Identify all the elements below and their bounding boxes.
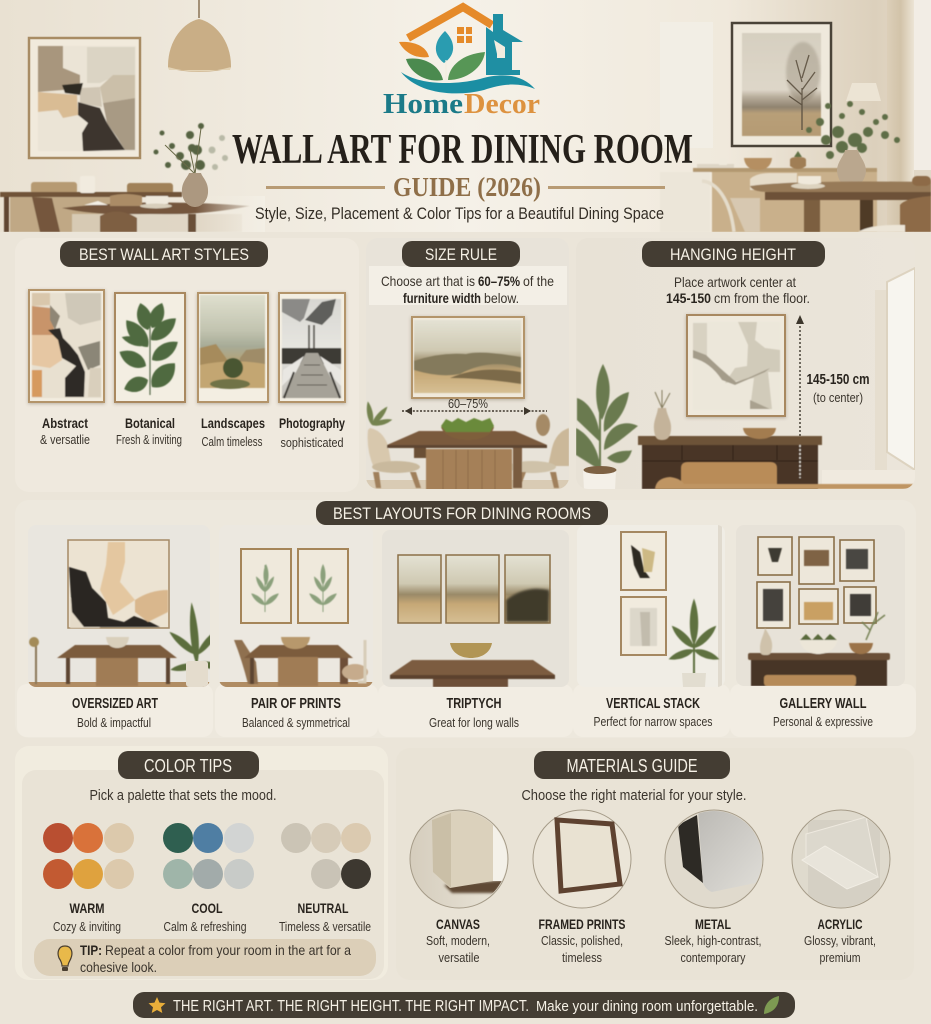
palette: warm: Cozy & inviting <box>53 919 121 934</box>
panel: color tips <box>15 746 388 980</box>
material: acrylic: Glossy, vibrant, <box>804 933 876 948</box>
label: pair of prints: Balanced & symmetrical <box>242 715 350 730</box>
height label: 145-150 cm <box>806 372 870 388</box>
label: gallery wall: GALLERY WALL <box>780 696 867 712</box>
icon: light bulb <box>58 946 72 971</box>
size rule plant <box>365 401 393 427</box>
heading: hanging height <box>642 241 825 267</box>
heading: color tips: COLOR TIPS <box>144 756 232 776</box>
label: triptych: Great for long walls <box>429 715 519 730</box>
height label: (to center) <box>813 390 863 405</box>
material: metal <box>664 810 770 965</box>
tip callout: cohesive look. <box>80 959 157 975</box>
left dining furniture <box>0 176 250 232</box>
gallery frame pictures <box>763 548 871 621</box>
palette: cool <box>163 823 254 934</box>
label: oversized art: OVERSIZED ART <box>72 696 158 712</box>
material: framed prints <box>533 810 631 965</box>
material: metal: METAL <box>695 916 731 932</box>
tip callout <box>34 939 376 976</box>
material: canvas: CANVAS <box>436 916 480 932</box>
size rule dining set <box>368 414 569 491</box>
color tips intro: Pick a palette that sets the mood. <box>90 787 276 804</box>
size rule artwork <box>412 317 524 398</box>
material: framed prints: Classic, polished, <box>541 933 623 948</box>
left fade <box>198 203 250 232</box>
layout: oversized art <box>28 539 210 730</box>
panel: materials guide <box>396 748 914 980</box>
size rule width arrow <box>402 399 547 415</box>
heading: best wall art styles <box>60 241 268 267</box>
hanging height text: 145-150 <box>666 290 711 306</box>
layout: triptych <box>389 554 556 730</box>
sideboard <box>638 436 822 489</box>
guide subtitle: GUIDE (2026) <box>393 172 541 202</box>
window <box>875 268 915 470</box>
label: oversized art: Bold & impactful <box>77 715 151 730</box>
right sideboard and bowls <box>692 150 878 232</box>
heading: color tips <box>118 751 259 779</box>
sofa <box>655 462 915 489</box>
pair dining set <box>234 637 368 686</box>
label: vertical stack: VERTICAL STACK <box>606 696 700 712</box>
palette: warm: WARM <box>70 900 104 916</box>
label: landscapes: Landscapes <box>201 415 265 431</box>
palette: neutral: NEUTRAL <box>298 900 349 916</box>
size rule text: Choose art that is <box>381 273 475 289</box>
label: photography <box>279 415 345 450</box>
title: WALL ART FOR DINING ROOM <box>232 127 693 173</box>
logo leaves <box>399 31 485 81</box>
material: canvas: versatile <box>438 950 480 965</box>
panel: hanging height <box>576 238 915 490</box>
pair artworks <box>241 549 348 623</box>
size rule text: furniture width <box>403 290 481 306</box>
logo <box>383 7 540 120</box>
guide subtitle <box>266 172 665 202</box>
heading: best layouts <box>316 501 608 525</box>
logo wordmark <box>383 89 540 120</box>
panel: size rule <box>365 238 569 491</box>
size rule width arrow: 60–75% <box>448 396 488 411</box>
heading: size rule <box>402 241 520 267</box>
material: acrylic: ACRYLIC <box>818 916 862 932</box>
material: canvas: Soft, modern, <box>426 933 490 948</box>
height label <box>806 372 870 405</box>
heading: best wall art styles: BEST WALL ART STYLES <box>79 245 249 264</box>
height arrow <box>796 315 804 436</box>
gallery frames <box>757 537 876 628</box>
palette: neutral <box>279 823 371 934</box>
triptych table <box>390 660 555 687</box>
label: gallery wall: Personal & expressive <box>773 714 873 729</box>
label: landscapes <box>201 415 265 449</box>
material: acrylic <box>792 810 890 965</box>
material: metal: Sleek, high-contrast, <box>664 933 762 948</box>
left abstract artwork <box>29 38 140 158</box>
oversized artwork <box>68 540 169 628</box>
panel: best layouts <box>15 500 916 738</box>
layout: vertical stack <box>594 525 722 728</box>
label: photography: sophisticated <box>280 436 344 450</box>
material: canvas <box>410 810 508 965</box>
vase and bowl <box>654 390 776 440</box>
artwork: photography <box>279 293 345 402</box>
footer message: Make your dining room unforgettable. <box>536 998 758 1015</box>
palette: cool: Calm & refreshing <box>164 919 246 934</box>
label: oversized art <box>72 696 158 730</box>
label: vertical stack <box>594 696 713 729</box>
material: metal: contemporary <box>680 950 746 965</box>
label: abstract: & versatlie <box>40 433 90 447</box>
left vase with plant <box>154 123 228 207</box>
label: vertical stack: Perfect for narrow spaces <box>594 714 713 729</box>
logo wave <box>401 72 535 93</box>
heading: best layouts: BEST LAYOUTS FOR DINING ROOMS <box>333 504 591 523</box>
size rule text: 60–75% <box>478 273 520 289</box>
label: pair of prints: PAIR OF PRINTS <box>251 696 341 712</box>
icon: star <box>148 997 166 1013</box>
heading: hanging height: HANGING HEIGHT <box>670 245 796 264</box>
size rule text <box>381 273 554 306</box>
label: triptych: TRIPTYCH <box>446 696 502 712</box>
heading: size rule: SIZE RULE <box>425 245 497 264</box>
panel: best wall art styles <box>15 238 359 492</box>
icon: leaf <box>764 996 779 1014</box>
gallery console and objects <box>748 612 890 686</box>
artwork: abstract <box>29 290 104 402</box>
footer banner <box>133 992 795 1018</box>
heading: materials guide: MATERIALS GUIDE <box>566 756 698 776</box>
size rule text: below. <box>484 290 519 306</box>
label: botanical: Botanical <box>125 415 175 431</box>
size rule text: of the <box>523 273 554 289</box>
material: framed prints: FRAMED PRINTS <box>538 916 626 932</box>
label: triptych <box>429 696 519 730</box>
layout: gallery wall <box>730 525 916 737</box>
heading: materials guide <box>534 751 730 779</box>
label: landscapes: Calm timeless <box>202 435 262 449</box>
header banner <box>0 0 931 232</box>
artwork: landscapes <box>198 293 268 402</box>
layout: pair of prints <box>220 548 372 730</box>
triptych artworks <box>398 555 550 623</box>
hanging height artwork <box>687 315 785 416</box>
oversized plant <box>169 602 210 687</box>
palette: neutral: Timeless & versatile <box>279 919 371 934</box>
logo wordmark: Home <box>383 89 463 120</box>
label: botanical <box>116 415 182 447</box>
right curtain and window <box>887 0 931 232</box>
palette: cool: COOL <box>192 900 223 916</box>
label: abstract: Abstract <box>42 415 88 431</box>
artwork: botanical <box>115 293 185 402</box>
materials intro: Choose the right material for your style. <box>522 787 746 804</box>
tagline: Style, Size, Placement & Color Tips for a Beautiful Dining Space <box>255 204 664 223</box>
label: photography: Photography <box>279 415 345 431</box>
hanging height text: cm from the floor. <box>714 290 810 306</box>
logo house <box>408 7 523 75</box>
triptych bowl <box>450 643 492 658</box>
hanging height text: Place artwork center at <box>674 274 796 290</box>
stack plant <box>667 598 721 687</box>
footer slogan: THE RIGHT ART. THE RIGHT HEIGHT. THE RIGHT IMPACT. <box>173 998 529 1015</box>
plant in white pot <box>576 364 638 490</box>
label: gallery wall <box>773 696 873 729</box>
oversized dining set <box>29 637 177 686</box>
label: botanical: Fresh & inviting <box>116 433 182 447</box>
stacked artworks <box>621 532 666 655</box>
hanging height text <box>666 274 810 306</box>
right framed landscape artwork <box>732 23 831 146</box>
pendant lamp <box>168 0 231 72</box>
material: acrylic: premium <box>820 950 860 965</box>
palette: warm <box>43 823 134 934</box>
logo wordmark: Decor <box>464 89 540 120</box>
label: pair of prints <box>242 696 350 730</box>
material: framed prints: timeless <box>562 950 602 965</box>
tip callout: TIP: <box>80 942 102 958</box>
tip callout: Repeat a color from your room in the art for a <box>105 942 351 958</box>
right dining table <box>702 173 931 232</box>
right lamp and vase with plant <box>806 83 900 187</box>
label: abstract <box>40 415 90 447</box>
